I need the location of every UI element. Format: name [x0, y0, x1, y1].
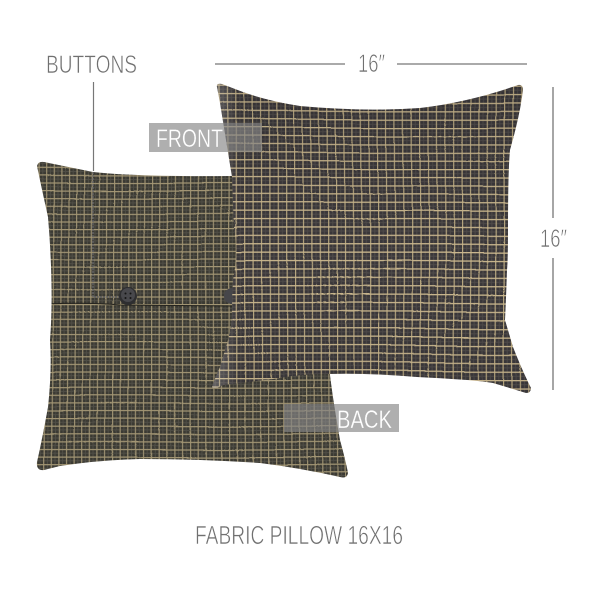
back pillow plaid fabric — [36, 162, 348, 478]
button left — [119, 287, 137, 305]
caption: FABRIC PILLOW 16X16 — [195, 520, 403, 550]
front pillow shading — [205, 80, 535, 400]
infographic canvas — [36, 54, 567, 544]
back pillow — [36, 162, 348, 478]
height dimension: 16″ — [540, 225, 567, 253]
front pillow plaid fabric — [212, 84, 531, 393]
front pillow — [212, 84, 531, 393]
buttons leader line — [92, 82, 94, 171]
buttons label: BUTTONS — [46, 51, 137, 79]
fold seam — [44, 303, 232, 306]
front pillow left edge highlight — [212, 84, 233, 388]
back label — [284, 404, 399, 434]
stitched vertical placket line — [93, 172, 120, 297]
back label: BACK — [337, 406, 392, 434]
width dimension: 16″ — [358, 50, 385, 78]
front label: FRONT — [156, 125, 223, 153]
button right, partly hidden — [224, 288, 232, 304]
